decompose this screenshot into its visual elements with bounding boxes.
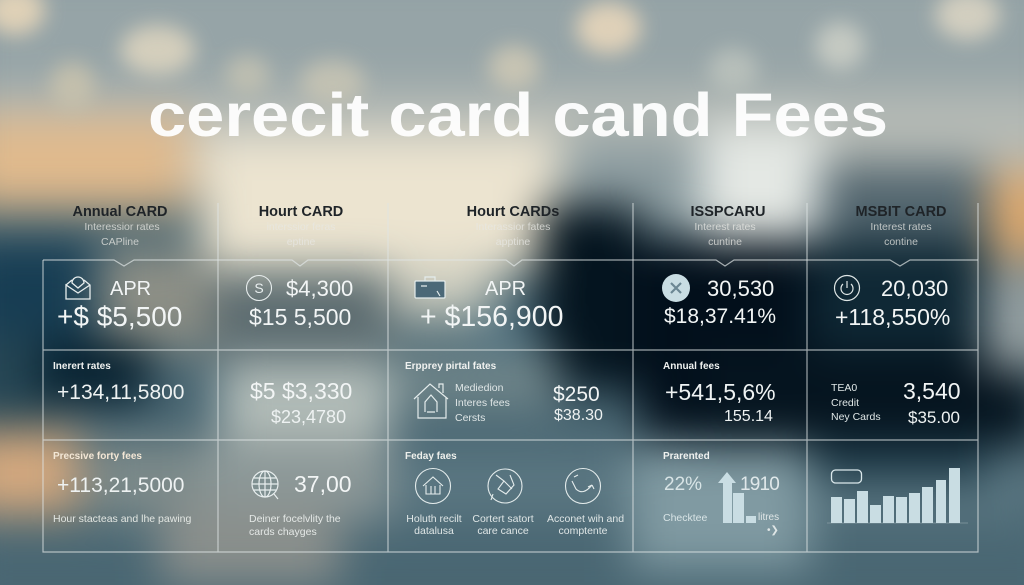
row 1 col 2 values [249, 276, 353, 330]
row 3 col 3: Holuth recilt [406, 513, 462, 525]
row 3 col 3 [405, 451, 624, 537]
title: cerecit card cand Fees [148, 81, 888, 149]
row 3 col 3: Cortert satort [472, 513, 534, 525]
column header: Hourt CARD: eptine [287, 236, 315, 248]
column header: Hourt CARD: Hourt CARD [259, 204, 343, 220]
row 2 col 4 [663, 361, 776, 425]
column header: MSBIT CARD: Interest rates [870, 221, 932, 233]
icon: x circle [662, 274, 690, 302]
row 2 col 5: Credit [831, 397, 859, 409]
row 2 col 4: 155.14 [724, 408, 773, 425]
row 1 col 1 values: APR [110, 278, 151, 300]
row 2 col 1: Inerert rates [53, 361, 111, 372]
row 2 col 3 [405, 361, 603, 424]
row 1 col 5 values [835, 276, 950, 330]
bar chart [827, 468, 968, 524]
row 1 col 3 values: + $156,900 [420, 301, 563, 333]
row 3 col 1: +113,21,5000 [57, 474, 184, 497]
column header: Annual CARD [72, 204, 168, 248]
row 1 col 5 values: +118,550% [835, 304, 950, 330]
row 3 col 3: Acconet wih and [547, 513, 624, 525]
row 1 col 1 values: +$ $5,500 [57, 301, 182, 332]
row 2 col 3: $250 [553, 383, 600, 406]
row 2 col 3: Cersts [455, 412, 485, 424]
row 1 col 1 values [57, 278, 182, 332]
row 3 col 1: Precsive forty fees [53, 451, 142, 462]
row 3 col 4: •❯ [767, 525, 779, 536]
row 1 col 2 values: $4,300 [286, 276, 353, 301]
row 2 col 1: +134,11,5800 [57, 381, 184, 404]
row 2 col 1 [53, 361, 184, 404]
row 3 col 1: Hour stacteas and lhe pawing [53, 513, 191, 525]
row 3 col 4: litres [758, 512, 779, 523]
row 3 col 2: 37,00 [294, 471, 352, 497]
row 2 col 4: Annual fees [663, 361, 720, 372]
column header: MSBIT CARD: contine [884, 236, 918, 248]
column header: ISSPCARU: ISSPCARU [691, 204, 765, 220]
row 1 col 4 values: $18,37.41% [664, 305, 776, 328]
column header: Hourt CARDs [467, 204, 559, 248]
icon: dollar circle: S [254, 280, 264, 296]
row 2 col 3: Erpprey pirtal fates [405, 361, 496, 372]
row 2 col 5: $35.00 [908, 408, 960, 427]
column header: MSBIT CARD: MSBIT CARD [855, 204, 947, 220]
row 2 col 4: +541,5,6% [665, 379, 776, 405]
column header: Hourt CARDs: apptine [496, 236, 530, 248]
row 3 col 4: 1910 [740, 474, 779, 495]
row 2 col 3: Interes fees [455, 397, 510, 409]
row 1 col 3 values [420, 278, 563, 333]
column header: MSBIT CARD [855, 204, 947, 248]
column header: Annual CARD: Interessior rates [84, 221, 160, 233]
icon: dollar circle [246, 275, 272, 301]
column header: Hourt CARD: interssior feras [267, 221, 335, 233]
row 1 col 5 values: 20,030 [881, 276, 948, 301]
row 3 col 2: Deiner focelvlity the [249, 513, 341, 525]
row 3 col 2 [249, 470, 352, 538]
column header: Hourt CARD [259, 204, 343, 248]
row 1 col 2 values: $15 5,500 [249, 304, 351, 330]
column header: Annual CARD: CAPline [101, 236, 139, 248]
row 3 col 4 [663, 451, 780, 536]
column header: ISSPCARU: cuntine [708, 236, 742, 248]
row 2 col 3: $38.30 [554, 407, 603, 424]
icon: power circle [834, 274, 860, 302]
row 3 col 3: care cance [477, 525, 529, 537]
icon: globe circle [487, 468, 522, 504]
row 3 col 3: Feday faes [405, 451, 457, 462]
icon: house circle [414, 468, 451, 504]
icon: envelope [65, 276, 91, 300]
row 3 col 3: datalusa [414, 525, 454, 537]
row 2 col 5: TEA0 [831, 382, 857, 394]
icon: arrows circle [564, 468, 601, 504]
column header: Annual CARD: Annual CARD [72, 204, 168, 220]
row 2 col 3: Mediedion [455, 382, 503, 394]
icon: house [414, 383, 448, 419]
row 2 col 2: $5 $3,330 [250, 378, 352, 404]
icon: briefcase card [414, 276, 446, 299]
column header: ISSPCARU: Interest rates [694, 221, 756, 233]
row 1 col 3 values: APR [485, 278, 526, 300]
row 1 col 4 values: 30,530 [707, 276, 774, 301]
column header: Hourt CARDs: Hourt CARDs [467, 204, 559, 220]
row 2 col 2 [250, 378, 352, 427]
row 1 col 4 values [664, 276, 776, 328]
row 3 col 4: Checktee [663, 512, 707, 524]
row 3 col 3: comptente [558, 525, 608, 537]
row 3 col 4: 22% [664, 474, 702, 495]
row 3 col 1 [53, 451, 191, 525]
row 2 col 5 [831, 378, 961, 427]
icon: up arrow bars [718, 472, 756, 523]
row 2 col 5: Ney Cards [831, 411, 881, 423]
icon: globe [251, 470, 279, 500]
column header: ISSPCARU [691, 204, 765, 248]
row 3 col 4: Prarented [663, 451, 710, 462]
row 3 col 2: cards chayges [249, 526, 317, 538]
row 2 col 2: $23,4780 [271, 407, 346, 427]
column header: Hourt CARDs: Interassior fates [476, 221, 550, 233]
row 2 col 5: 3,540 [903, 378, 961, 404]
